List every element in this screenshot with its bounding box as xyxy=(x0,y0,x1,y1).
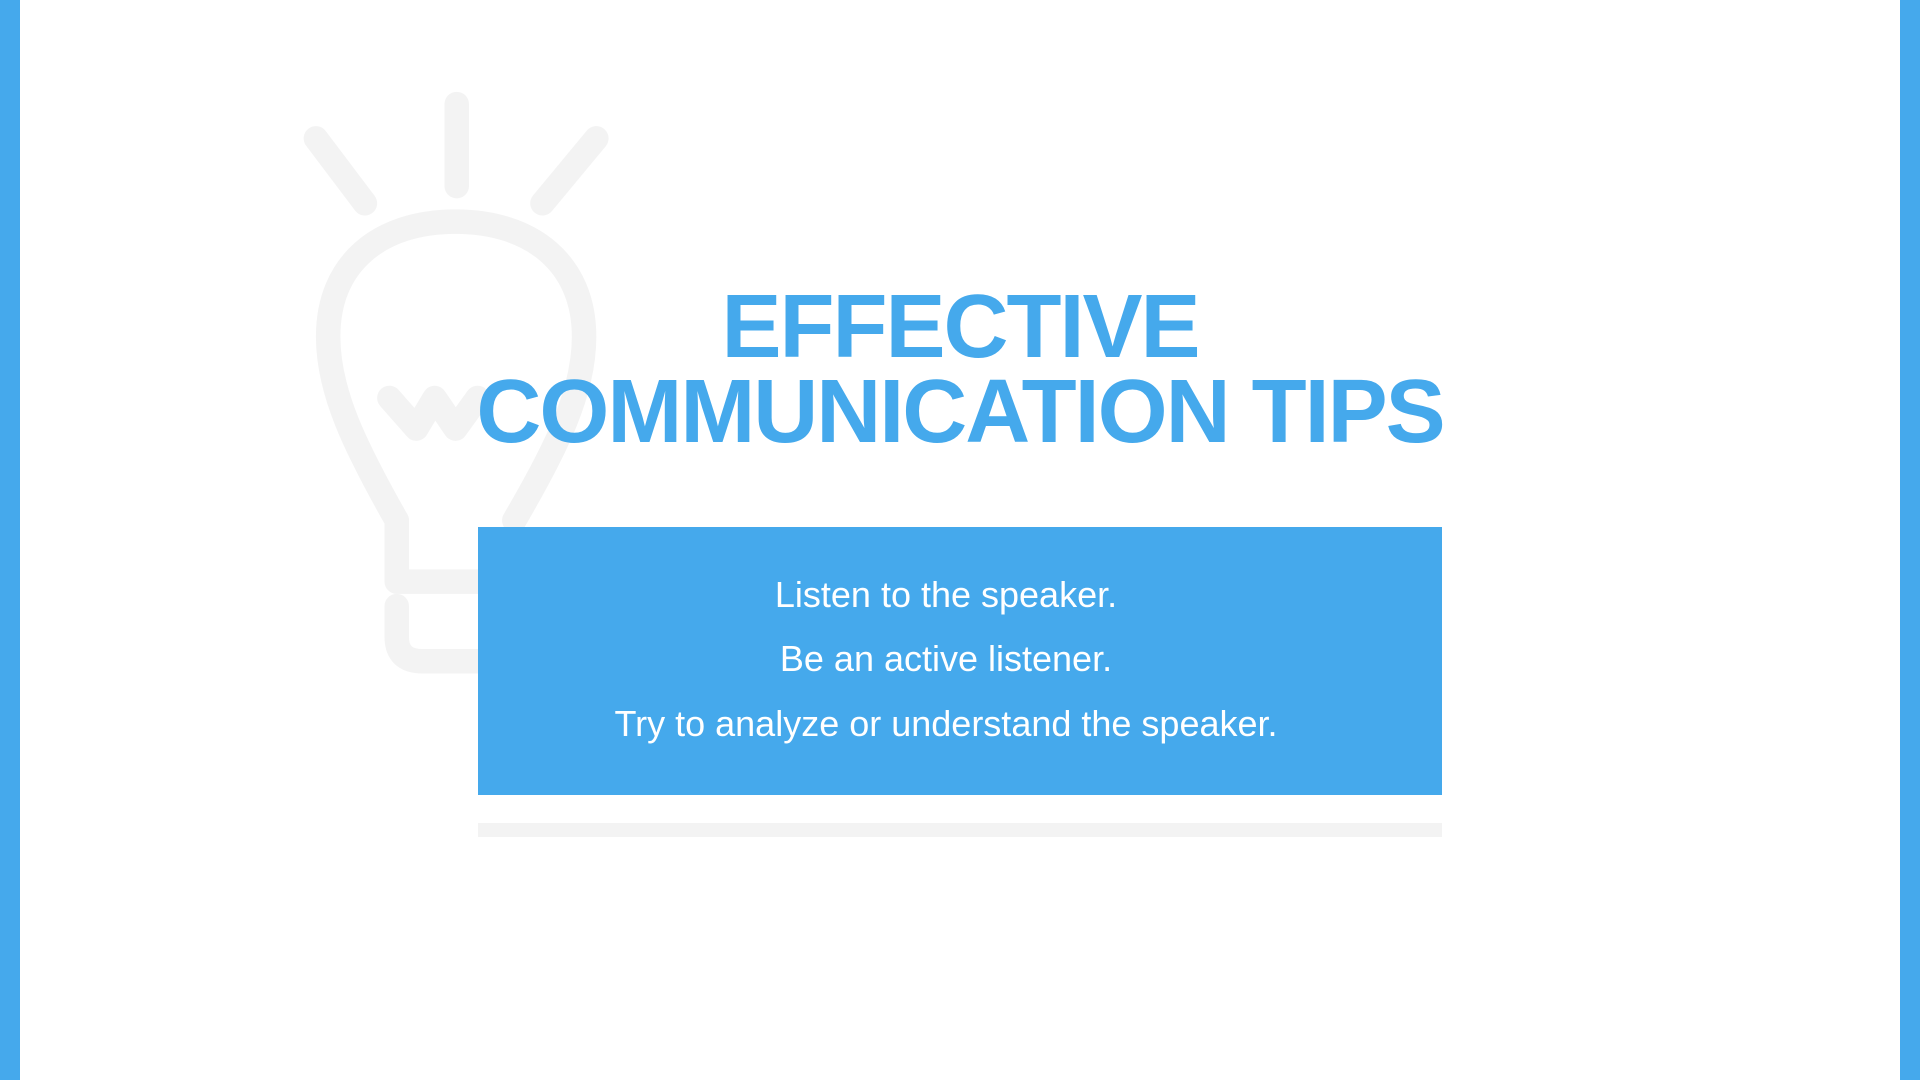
text: tip 2: Be an active listener. xyxy=(780,638,1112,679)
left border bar xyxy=(0,0,20,1080)
panel: tips box xyxy=(478,527,1442,795)
title: EFFECTIVE xyxy=(721,277,1199,377)
text: tip 3: Try to analyze or understand the speaker. xyxy=(614,703,1278,744)
right border bar xyxy=(1900,0,1920,1080)
title: COMMUNICATION TIPS xyxy=(476,362,1444,462)
title xyxy=(476,277,1444,462)
grey underline bar xyxy=(478,823,1442,837)
text: tip 1: Listen to the speaker. xyxy=(775,574,1117,615)
